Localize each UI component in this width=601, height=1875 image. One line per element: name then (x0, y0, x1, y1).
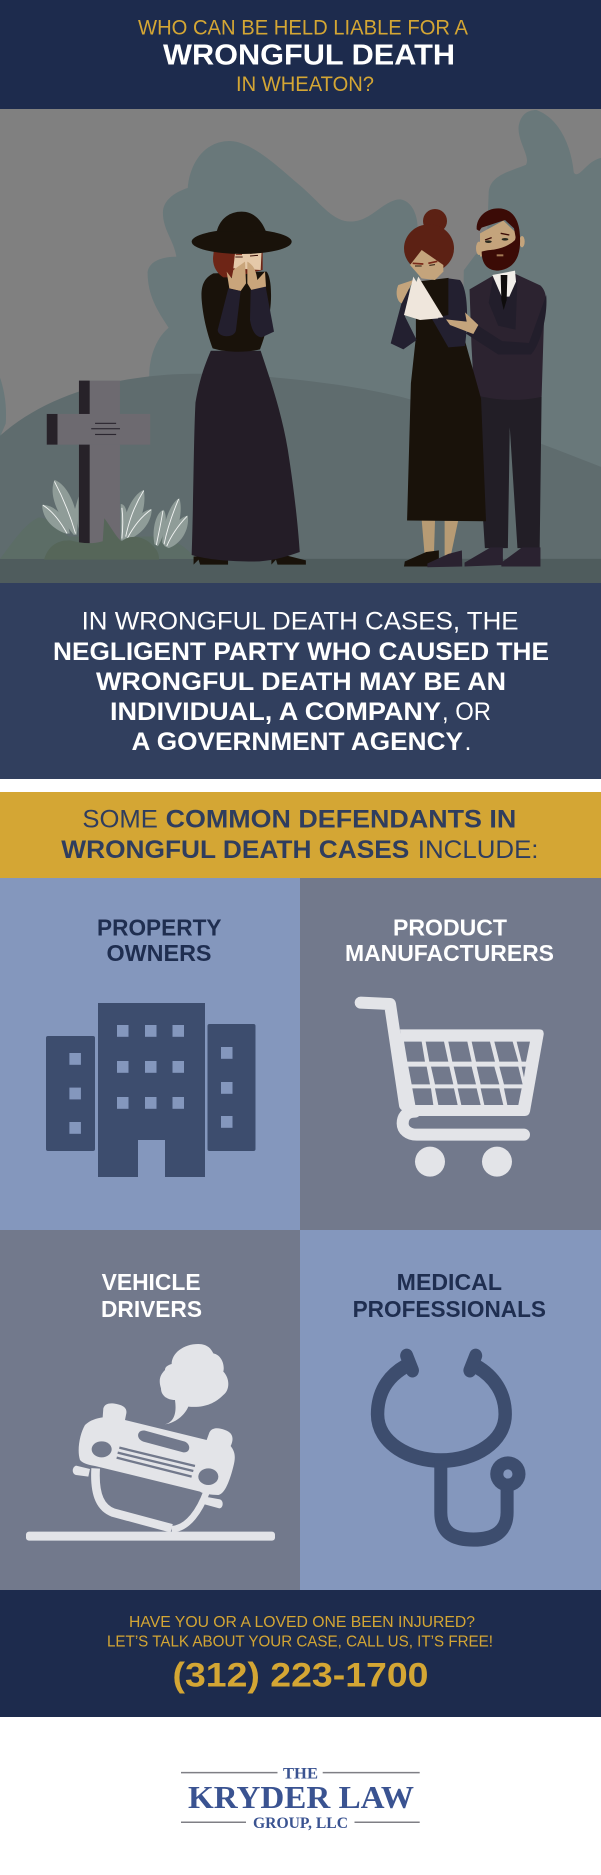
panel: intro statement: , OR (442, 698, 491, 726)
panel: property owners: OWNERS (106, 940, 212, 966)
panel: property owners (0, 878, 300, 1230)
figure: woman in hat (192, 212, 306, 565)
back shrub (0, 517, 195, 559)
panel: intro statement: WRONGFUL DEATH MAY BE AN (96, 668, 506, 696)
ground (0, 559, 601, 583)
panel: common defendants heading: INCLUDE: (418, 836, 538, 864)
heading line: in wheaton: IN WHEATON? (236, 72, 374, 96)
panel: product manufacturers (300, 878, 601, 1230)
panel: product manufacturers: PRODUCT (393, 915, 507, 941)
panel: intro statement (0, 583, 601, 779)
panel: common defendants heading: WRONGFUL DEATH CASES (61, 836, 409, 864)
panel: intro statement: IN WRONGFUL DEATH CASES, THE (82, 608, 519, 636)
illustration: funeral scene (0, 109, 601, 583)
icon: stethoscope (378, 1356, 526, 1540)
panel: common defendants heading: COMMON DEFENDANTS IN (166, 806, 516, 834)
gravestone cross (47, 381, 150, 545)
panel: medical professionals (300, 1230, 601, 1590)
panel: vehicle drivers: DRIVERS (101, 1296, 202, 1322)
panel: common defendants heading (0, 792, 601, 878)
heading line: who can be held liable: WHO CAN BE HELD LIABLE FOR A (138, 16, 469, 40)
panel: medical professionals: MEDICAL (397, 1269, 502, 1295)
panel: vehicle drivers (0, 1230, 300, 1590)
panel: vehicle drivers: VEHICLE (102, 1269, 201, 1295)
panel: property owners: PROPERTY (97, 915, 222, 941)
figure: woman with handkerchief (391, 209, 486, 567)
panel: intro statement: A GOVERNMENT AGENCY (132, 728, 463, 756)
logo: The Kryder Law Group (181, 1766, 420, 1832)
logo: The Kryder Law Group: GROUP, LLC (253, 1815, 348, 1832)
icon: shopping cart (361, 1003, 544, 1177)
panel: call to action: LET’S TALK ABOUT YOUR CASE, CALL US, IT’S FREE! (107, 1634, 493, 1650)
plants (42, 480, 188, 548)
panel: call to action (0, 1590, 601, 1717)
logo: The Kryder Law Group: THE (283, 1766, 318, 1782)
panel: product manufacturers: MANUFACTURERS (345, 940, 554, 966)
icon: buildings (46, 1003, 256, 1177)
logo: The Kryder Law Group: KRYDER LAW (188, 1779, 414, 1815)
icon: overturned car with smoke (73, 1344, 235, 1529)
panel: medical professionals: PROFESSIONALS (353, 1296, 546, 1322)
panel: common defendants heading: SOME (82, 806, 158, 834)
panel: header title (0, 0, 601, 109)
figure: man in suit (465, 208, 546, 567)
grass mound (44, 518, 159, 560)
phone number: (312) 223-1700 (172, 1657, 428, 1695)
panel: intro statement: . (464, 728, 471, 756)
hill (0, 374, 601, 583)
heading: wrongful death: WRONGFUL DEATH (163, 40, 455, 72)
icon: ground line (26, 1532, 275, 1541)
panel: call to action: HAVE YOU OR A LOVED ONE BEEN INJURED? (129, 1614, 475, 1631)
panel: intro statement: INDIVIDUAL, A COMPANY (110, 698, 441, 726)
background foliage (0, 110, 601, 498)
panel: intro statement: NEGLIGENT PARTY WHO CAUSED THE (53, 638, 549, 666)
